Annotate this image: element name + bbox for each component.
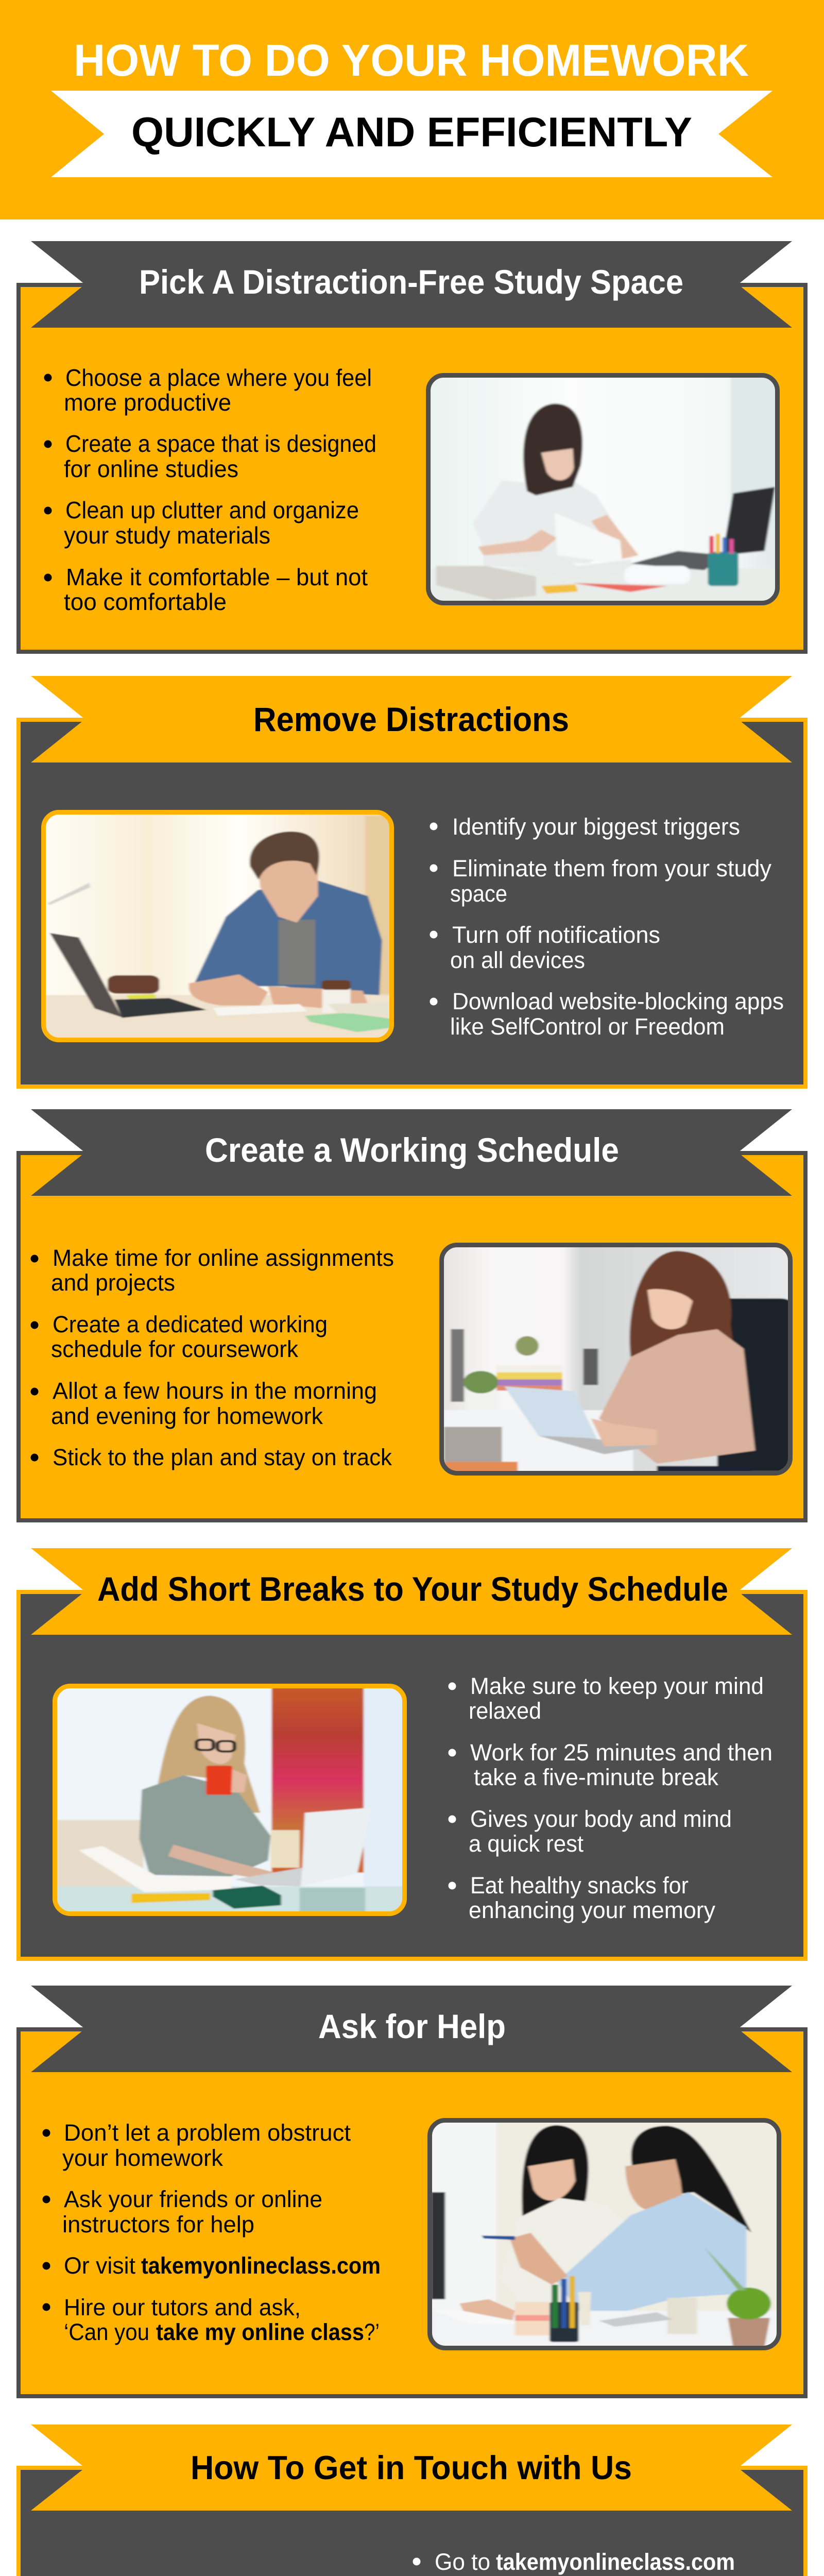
ribbon heading [31, 1548, 792, 1635]
bullet list: Turn off notifications [452, 922, 660, 948]
bullet list: Eat healthy snacks for [470, 1872, 689, 1899]
panel: ask for help [19, 1986, 805, 2396]
photo: young man writing beside laptop [37, 807, 405, 1044]
bullet list: ‘Can you [64, 2319, 149, 2345]
ribbon heading [31, 676, 792, 762]
bullet list: Choose a place where you feel [65, 364, 372, 391]
panel: remove distractions [19, 676, 805, 1087]
ribbon heading: How To Get in Touch with Us [191, 2449, 632, 2486]
bullet list: Make it comfortable – but not [66, 564, 368, 590]
ribbon heading [31, 241, 792, 328]
bullet list: Create a space that is designed [65, 430, 376, 457]
bullet list: and evening for homework [51, 1403, 323, 1429]
bullet list: Go to [435, 2549, 490, 2575]
bullet list [31, 1245, 394, 1470]
bullet list: takemyonlineclass.com [496, 2549, 735, 2575]
title ribbon [51, 91, 772, 177]
ribbon heading: Remove Distractions [253, 700, 569, 738]
ribbon heading: Add Short Breaks to Your Study Schedule [97, 1570, 728, 1608]
bullet list: schedule for coursework [51, 1336, 298, 1362]
bullet list: Make sure to keep your mind [470, 1673, 764, 1699]
bullet list [448, 1673, 772, 1923]
bullet list: for online studies [64, 455, 238, 482]
bullet list: take a five-minute break [474, 1764, 718, 1790]
panel: add short breaks to your study schedule [19, 1548, 805, 1959]
bullet list: relaxed [469, 1698, 541, 1724]
panel: create a working schedule [19, 1109, 805, 1520]
bullet list: and projects [51, 1269, 175, 1296]
photo: woman working at laptop [436, 1243, 799, 1477]
photo: student reading at desk [420, 367, 788, 611]
photo: two women at a computer [426, 2117, 788, 2351]
ribbon heading: Ask for Help [318, 2007, 506, 2045]
bullet list: ?’ [364, 2319, 380, 2345]
bullet list: too comfortable [64, 588, 227, 615]
bullet list: Download website-blocking apps [452, 988, 784, 1014]
title line 1: HOW TO DO YOUR HOMEWORK [74, 36, 749, 86]
bullet list: takemyonlineclass.com [141, 2252, 381, 2279]
bullet list: Work for 25 minutes and then [470, 1739, 772, 1766]
panel: how to get in touch with us [19, 2425, 805, 2576]
bullet list [42, 2120, 381, 2345]
bullet list: Identify your biggest triggers [452, 814, 740, 840]
bullet list [413, 2549, 787, 2576]
bullet list: Allot a few hours in the morning [53, 1378, 377, 1404]
bullet list: Don’t let a problem obstruct [64, 2120, 351, 2146]
bullet list: Make time for online assignments [53, 1245, 394, 1271]
bullet list [44, 364, 376, 615]
ribbon heading [31, 1986, 792, 2072]
bullet list: your study materials [64, 522, 270, 549]
ribbon heading [31, 2425, 792, 2511]
header banner [0, 0, 824, 219]
bullet list: Ask your friends or online [64, 2186, 322, 2212]
bullet list: like SelfControl or Freedom [450, 1013, 725, 1040]
bullet list: Eliminate them from your study [452, 855, 771, 882]
bullet list: your homework [62, 2145, 223, 2171]
bullet list [430, 814, 784, 1040]
bullet list: Gives your body and mind [470, 1806, 732, 1832]
bullet list: Hire our tutors and ask, [64, 2294, 301, 2320]
bullet list: enhancing your memory [469, 1897, 715, 1923]
bullet list: Or visit [64, 2252, 135, 2279]
ribbon heading: Pick A Distraction-Free Study Space [139, 263, 683, 301]
bullet list: instructors for help [62, 2211, 254, 2238]
ribbon heading [31, 1109, 792, 1196]
ribbon heading: Create a Working Schedule [205, 1131, 619, 1169]
bullet list: Stick to the plan and stay on track [53, 1444, 392, 1470]
title line 2: QUICKLY AND EFFICIENTLY [131, 109, 692, 156]
panel: pick a distraction-free study space [19, 241, 805, 652]
bullet list: a quick rest [469, 1831, 583, 1857]
bullet list: Create a dedicated working [53, 1311, 328, 1337]
bullet list: Clean up clutter and organize [65, 497, 359, 523]
bullet list: more productive [64, 389, 231, 416]
photo: woman drinking from red mug [47, 1683, 410, 1917]
bullet list: take my online class [156, 2319, 364, 2345]
bullet list: on all devices [450, 947, 585, 973]
bullet list: space [450, 880, 507, 907]
